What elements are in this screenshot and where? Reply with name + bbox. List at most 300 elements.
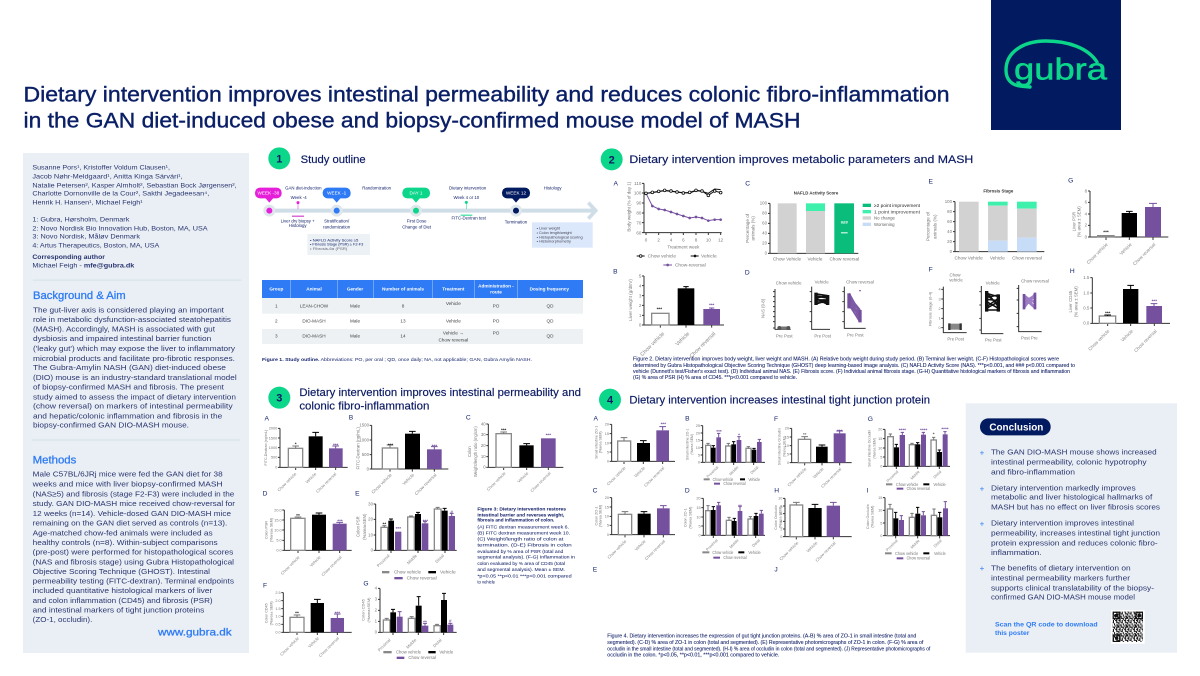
text: methods: (ZO-1, occludin). [33,615,92,624]
table: study groups: LEAN-CHOW [300,304,329,309]
chart E: colon PSR segmental: Middle [406,553,418,565]
chart A: body weight line chart: 8 [695,237,698,242]
chart C: NAFLD activity score stacked bars: 80 [762,211,768,216]
chart B: small intestine ZO-1 segmental: Distal [750,465,759,475]
legend: chart E: Chow vehicle [394,570,422,575]
table: study groups: PO [493,330,500,335]
conclusion bullets: intestinal permeability markers further [991,574,1130,583]
chart G: small intestine occludin segmental: 20 [878,428,882,432]
chart C: colon weight/length ratio: *** [501,428,507,433]
chart C: colon weight/length ratio: 10 [481,454,486,459]
conclusion bullets: + [980,484,985,493]
chart D: colon ZO-1 segmental: (%area SEM) [688,507,692,529]
chart H: colon occludin total [774,487,852,563]
legend: NAS: Worsening [874,222,895,227]
caption: figure 2 [633,356,1075,381]
chart G: small intestine occludin segmental: Small intestine Occludin [868,430,872,467]
chart E: colon PSR segmental: Proximal [376,553,391,568]
chart F: small intestine occludin total: 10 [785,444,789,448]
panel: section 2 metabolic parameters and MASH [601,148,1170,381]
chart E: fibrosis stage stacked bars: Vehicle [990,255,1005,260]
chart G: small intestine occludin segmental: **** [920,428,927,433]
chart G: small intestine occludin segmental: 0 [880,465,882,469]
legend: chart B: Chow vehicle [713,477,734,482]
chart G: liver PSR bars: Chow reversal [1132,242,1156,267]
chart D: colon ZO-1 segmental: 0 [699,534,701,538]
legend: chart G [383,650,454,660]
chart B: small intestine ZO-1 segmental: Small intestine ZO-1 [685,428,689,460]
chart D: individual NAS: Chow reversal [846,279,874,284]
inclusion criteria box: • Fibrosis-6α (PSR) [310,247,347,251]
timeline labels: Stratification/ [324,218,350,223]
chart H: colon occludin total: H [774,487,779,494]
chart F: small intestine occludin total: Vehicle [812,466,825,479]
chart D: individual NAS: Pre Post [776,334,793,339]
text: background and aim: (DIO) mouse is an industry-standard translational model [33,373,237,382]
heading: study outline: 1 [276,153,282,165]
chart C: colon weight/length ratio: 0 [483,465,486,470]
text: methods: Male C57BL/6JRj mice were fed the GAN diet for 38 [33,470,223,479]
chart E: colon PSR segmental: 20 [368,517,374,522]
chart E: colon PSR segmental: ** [383,521,386,526]
chart E: colon PSR segmental: 10 [368,532,374,537]
caption: figure 3 [477,507,575,586]
caption: figure 4: segmented). (C-D) % area of ZO-1 in colon (total and segmented). (E) Representative photomicrographs of ZO-1 in colon. (F-G) % area of [607,640,924,646]
chart G: small intestine occludin segmental [868,416,950,491]
chart B: small intestine ZO-1 segmental: 5 [698,453,700,457]
chart B: liver weight bars: *** [657,307,662,312]
text: background and aim: microbial products and facilitate pro-fibrotic responses. [33,354,235,363]
endpoints box: • Liver weight [537,227,560,231]
chart B: liver weight bars: 4 [639,283,642,288]
legend: chart G: Chow reversal [408,655,436,660]
chart A: small intestine ZO-1 total: Chow reversal [643,465,665,488]
heading: section 2: Dietary intervention improves metabolic parameters and MASH [629,154,973,166]
chart A: body weight line chart: 2 [657,237,660,242]
chart B: liver weight bars: 0 [639,323,642,328]
chart A: small intestine ZO-1 total: Chow vehicle [606,465,627,486]
caption: figure 3: colon evaluated by % area of CD45 (total [477,561,565,567]
chart H: liver CD45 bars: 1.0 [1083,290,1090,295]
chart D: individual NAS [745,270,874,339]
chart B: small intestine ZO-1 segmental: 25 [696,424,700,428]
chart F: small intestine occludin total: Chow reversal [820,466,842,489]
chart B: small intestine ZO-1 segmental: Proximal [706,465,719,479]
text: methods: and intestinal markers of tight junction proteins [33,606,205,615]
conclusion heading pill [980,418,1051,435]
endpoints box: • Colon length/weight [537,231,572,235]
table: study groups: PO [493,319,500,324]
chart A: FITC-dextran week 6: 0 [275,466,277,470]
legend: chart G: Chow vehicle [396,650,422,655]
QR call to action [995,623,1098,637]
chart C: colon ZO-1 total: 5 [607,524,609,528]
caption: figure 2: determined by Gubra Histopathological Objective Scoring Technique (GHOST) deep learning-based image analysis. (C) NAFLD Activity Score (NAS). ***p<0.001, and ### p<0.001 compared to [633,363,1075,369]
chart E: colon PSR segmental: 30 [368,501,374,506]
chart H: liver CD45 bars: 1.5 [1083,275,1090,280]
chart F: small intestine occludin total: Chow vehicle [786,466,808,487]
chart F: colon CD45 total: 0.5 [275,623,281,627]
table: study groups: 14 [400,334,406,339]
text: methods: weeks and mice with liver biopsy-confirmed MASH [32,480,223,489]
chart G: small intestine occludin segmental: Proximal [886,470,899,483]
text: methods: and colon inflammation (CD45) and fibrosis (PSR) [33,596,213,605]
chart B: small intestine ZO-1 segmental: 0 [698,461,700,465]
chart G: liver PSR bars: G [1068,177,1073,184]
chart G: colon CD45 segmental: Distal [432,637,443,648]
chart A: small intestine ZO-1 total [593,416,675,488]
chart I: colon occludin segmental: Middle [910,539,921,550]
panel: conclusion [966,403,1177,653]
chart G: small intestine occludin segmental: (%area SEM) [872,438,876,459]
chart A: small intestine ZO-1 total: 0 [607,460,609,464]
chart A: small intestine ZO-1 total: (%area SEM) [599,431,603,453]
chart G: colon CD45 segmental: # [449,619,452,624]
chart A: small intestine ZO-1 total: Small intestine ZO-1 [594,426,598,459]
text: background and aim: The Gubra-Amylin NASH (GAN) diet-induced obese [33,363,226,372]
legend: chart I: Vehicle [934,551,946,556]
chart F: small intestine occludin total: ** [803,432,807,437]
authors and affiliations: Corresponding author [32,254,106,261]
legend: chart D4: Vehicle [748,550,761,555]
chart D: colon ZO-1 segmental: Colon ZO-1 [684,508,688,527]
table: study groups: Dosing frequency [530,287,569,292]
chart F: individual fibrosis stage: 3 [939,297,941,301]
chart A: FITC-dextran week 6: 2000 [269,427,277,431]
chart B: small intestine ZO-1 segmental: (%area SEM) [690,434,694,455]
chart F: individual fibrosis stage: Pre Post [947,337,965,342]
heading: section 3: 3 [276,393,282,405]
legend: chart D4 [702,550,761,560]
panel: authors, background and methods [23,153,249,653]
legend: NAS: ≥2 point improvement [874,203,921,208]
chart B: liver weight bars: Liver weight (g/dEV) [628,279,633,321]
chart H: liver CD45 bars: *** [1105,310,1111,315]
chart H: liver CD45 bars: Chow vehicle [1087,328,1111,352]
chart G: small intestine occludin segmental: **** [941,426,949,431]
legend: chart I [885,551,946,561]
caption: figure 3: (B) FITC dextran measurement week 10. [477,530,570,536]
chart C: NAFLD activity score stacked bars: 60 [762,221,768,226]
chart F: individual fibrosis stage: Chow reversal [1021,278,1049,283]
panel: section 4 tight junction protein [593,389,950,658]
chart B: small intestine ZO-1 segmental: *** [716,429,722,434]
heading: section 2: 2 [609,154,615,166]
chart H: colon occludin total: 10 [778,497,782,501]
chart G: liver PSR bars: 4 [1085,211,1088,216]
chart F: colon CD45 total: 2.0 [275,599,281,603]
text: methods: Objective Scoring Technique (GHOST). Intestinal [33,567,210,576]
chart A: body weight line chart: Chow vehicle [648,254,677,259]
authors and affiliations: Natalie Petersen², Kasper Almholt², Sebastian Bock Jørgensen², [32,183,237,190]
table: study groups: QD [547,334,554,339]
chart A: small intestine ZO-1 total: 15 [605,432,609,436]
caption: figure 3: segmental analysis). (F-G) Inflammation in [477,555,575,561]
chart D: colon ZO-1 segmental [684,487,765,560]
chart C: NAFLD activity score stacked bars: 100 [760,201,768,206]
chart H: liver CD45 bars: H [1070,268,1075,275]
text: background and aim [33,306,237,430]
inclusion criteria box [307,234,370,255]
chart G: colon CD45 segmental: 0 [375,630,378,635]
chart A: FITC-dextran week 6: Chow reversal [315,471,337,494]
chart F: individual fibrosis stage: Chow [949,272,961,277]
chart D: colon PSR total [263,491,352,577]
chart C: NAFLD activity score stacked bars: 20 [762,241,768,246]
table: study groups: QD [547,304,554,309]
conclusion bullets: metabolic and liver histological hallmarks of [991,493,1153,502]
conclusion bullets: The benefits of dietary intervention on [991,563,1131,572]
table: study groups: DIO-MASH [302,319,326,324]
table: study groups [262,280,583,344]
chart A: body weight line chart: 90 [636,201,642,206]
legend: chart D4: Chow vehicle [712,550,734,555]
chart B: FITC-dextran week 10: Vehicle [401,472,416,486]
chart C: colon weight/length ratio: Colon [467,446,472,457]
chart G: colon CD45 segmental: 4 [375,586,378,591]
legend: chart G4: Chow vehicle [896,482,919,487]
chart C: colon ZO-1 total: 10 [605,515,609,519]
chart B: FITC-dextran week 10: 1000 [359,437,370,442]
chart C: colon weight/length ratio: Chow vehicle [486,470,507,492]
chart F: individual fibrosis stage: Pre Post [985,338,1002,343]
chart D: colon PSR total: D [263,491,268,498]
chart G: small intestine occludin segmental: 10 [878,446,882,450]
caption: figure 3: fibrosis and inflammation of colon. [477,518,555,524]
text: methods: 12 weeks (n=14). Vehicle-dosed GAN DIO-MASH mice [33,509,231,518]
chart G: colon CD45 segmental: 1 [375,619,378,624]
chart D: colon PSR total: ** [296,513,300,518]
chart C: colon weight/length ratio: 20 [481,443,486,448]
milestone: week 12: WEEK 12 [506,191,526,196]
chart C: NAFLD activity score stacked bars [745,181,921,262]
chart C: NAFLD activity score stacked bars: animals (%) [751,216,756,241]
table: study groups: Group [269,287,283,292]
chart D: colon PSR total: 20.0 [274,508,282,512]
chart A: FITC-dextran week 6: FITC-Dextran (ng/mL) [264,430,268,466]
legend: chart B: Chow reversal [723,481,746,486]
chart F: individual fibrosis stage: vehicle [949,277,963,282]
chart H: colon occludin total: 2 [780,527,782,531]
chart A: body weight line chart: 12 [718,237,724,242]
chart H: colon occludin total: 6 [780,512,782,516]
chart A: small intestine ZO-1 total: 10 [605,441,609,445]
chart F: colon CD45 total: 2.5 [275,591,281,595]
chart I: colon occludin segmental: 5 [880,521,882,525]
chart D: colon ZO-1 segmental: 5 [699,524,701,528]
chart H: colon occludin total: 8 [780,504,782,508]
chart E: fibrosis stage stacked bars: Chow Vehicle [955,255,983,260]
chart B: FITC-dextran week 10: 500 [362,452,370,457]
chart E: fibrosis stage stacked bars: Fibrosis Stage [983,188,1014,193]
chart I: colon occludin segmental: I [867,487,869,494]
logo: gubra: gubra [1014,52,1108,86]
chart A: body weight line chart: Treatment week [667,245,700,250]
chart H: liver CD45 bars: *** [1152,298,1157,303]
timeline labels: Histology [544,185,562,190]
authors and affiliations: Charlotte Dornonville de la Cour², Sakthi Jegadeesan⁴, [32,191,210,198]
conclusion bullets: Dietary intervention improves intestinal [991,519,1134,528]
chart B: small intestine ZO-1 segmental: * [738,433,740,438]
chart G: colon CD45 segmental: G [363,581,369,588]
text: background and aim: and hepatic/colonic inflammation and fibrosis in the [33,412,222,421]
chart I: colon occludin segmental [866,487,950,561]
chart C: colon ZO-1 total: 0 [607,533,609,537]
chart A: FITC-dextran week 6: *** [333,443,339,448]
chart E: fibrosis stage stacked bars: animals (%) [933,214,938,239]
chart C: colon ZO-1 total: Chow reversal [644,539,666,561]
chart I: colon occludin segmental: Colon Occludin [866,504,870,529]
panel: section 1 study outline [255,147,596,362]
chart B: small intestine ZO-1 segmental [685,416,765,486]
chart A: body weight line chart: Vehicle [701,254,717,259]
chart B: FITC-dextran week 10: 0 [367,466,370,471]
milestone: week 12 [502,188,530,217]
caption: figure 2: (G) % area of PSR (H) % area of CD45. ***p<0.001 compared to vehicle. [633,375,797,381]
website link: www.gubra.dk [157,627,233,638]
chart B: FITC-dextran week 10: *** [388,442,393,447]
chart A: body weight line chart: 4 [670,237,673,242]
chart C: NAFLD activity score stacked bars: Vehicle [807,257,823,262]
chart G: small intestine occludin segmental: **** [899,428,906,433]
caption: figure 3: (A) FITC dextran measurement week 6. [477,524,569,530]
conclusion bullets: and fibro-inflammation [991,468,1075,477]
timeline [255,185,596,255]
chart I: colon occludin segmental: (%area SEM) [871,506,875,528]
legend: chart I: Chow vehicle [895,551,919,556]
milestone: week -38 [255,188,282,217]
caption: figure 4 [607,634,931,658]
text: methods [32,470,235,624]
conclusion bullets: inflammation. [991,548,1042,557]
legend: chart B: Vehicle [748,477,761,482]
chart D: colon PSR total: 10.0 [274,528,282,532]
chart B: FITC-dextran week 10: Chow reversal [414,472,438,496]
chart C: NAFLD activity score stacked bars: Chow Vehicle [773,257,802,262]
chart C: colon ZO-1 total: Chow vehicle [606,538,628,560]
heading: study outline: Study outline [301,154,366,166]
text: background and aim: role in metabolic dysfunction-associated steatohepatitis [33,315,231,324]
chart H: colon occludin total: Colon Occludin [774,505,778,530]
caption: figure 3: to vehicle [477,580,495,586]
chart D: colon ZO-1 segmental: ** [738,503,742,508]
legend: NAS [863,203,921,227]
chart A: body weight line chart: 10 [706,237,711,242]
text: background and aim: ('leaky gut') which may expose the liver to inflammatory [33,344,235,353]
chart F: small intestine occludin total: F [774,416,778,423]
chart A: body weight line chart: A [613,181,618,188]
text: methods: (NAS and fibrosis stage) using Gubra Histopathological [33,557,234,566]
chart E: fibrosis stage stacked bars [926,178,1044,260]
table: study groups: 3 [275,334,278,339]
title: Dietary intervention improves intestinal permeability and reduces colonic fibro-inflammation [24,82,949,106]
heading: background and aim: Background & Aim [33,290,126,302]
chart G: small intestine occludin segmental: G [868,416,873,423]
chart D: colon ZO-1 segmental: Distal [751,538,761,548]
logo: gubra [991,0,1121,130]
chart H: liver CD45 bars: (% area ± SEM) [1074,286,1079,317]
timeline labels: randomization [323,224,351,229]
chart A: body weight line chart: 110 [634,181,642,186]
chart A: FITC-dextran week 6: 500 [271,456,277,460]
table: study groups: route [490,290,502,295]
chart D: individual NAS: Chow vehicle [776,281,802,286]
chart A: body weight line chart: 0 [645,237,648,242]
chart C: NAFLD activity score stacked bars: NAFLD Activity Score [794,191,839,196]
chart E: colon PSR segmental: Colon PSR [356,516,361,537]
chart G: liver PSR bars: Vehicle [1119,242,1133,256]
text: background and aim: The gut-liver axis is considered playing an important [33,306,225,315]
milestone: day 1 [402,188,430,217]
caption: figure 4: Figure 4. Dietary intervention increases the expression of gut tight junction proteins. (A-B) % area of ZO-1 in small intestine (total and [607,634,916,640]
legend: NAS: No change [874,216,896,221]
text: background and aim: (chow reversal) on markers of intestinal permeability [33,402,233,411]
chart C: colon weight/length ratio: *** [546,433,551,438]
conclusion bullets: + [980,564,985,573]
chart C: colon weight/length ratio: C [466,415,471,422]
authors and affiliations: 4: Artus Therapeutics, Boston, MA, USA [32,243,160,250]
chart F: colon CD45 total: Vehicle [307,635,320,649]
chart G: colon CD45 segmental: 2 [375,608,378,613]
chart B: liver weight bars: Chow reversal [689,331,717,360]
authors and affiliations: 1: Gubra, Hørsholm, Denmark [32,216,130,223]
legend: chart E [382,570,456,581]
chart F: small intestine occludin total: 0 [787,461,789,465]
chart F: small intestine occludin total [774,416,852,489]
table: study groups: Vehicle [446,319,461,324]
QR code [1111,610,1145,644]
chart I: colon occludin segmental: 15 [878,496,882,500]
text: methods: (NAS≥5) and fibrosis (stage F2-F3) were included in the [33,490,234,499]
chart D: colon PSR total: (%area± SEM) [270,518,274,542]
chart C: colon weight/length ratio: 30 [481,432,486,437]
chart B: FITC-dextran week 10: Chow vehicle [370,472,393,495]
conclusion bullets: + [980,519,985,528]
chart B: liver weight bars: 2 [639,303,642,308]
labels: photomicrograph panels E and J [593,566,778,573]
title: in the GAN diet-induced obese and biopsy-confirmed mouse model of MASH [24,108,800,132]
chart A: FITC-dextran week 6: A [264,416,269,423]
caption: figure 2: vehicle (Dunnett's test/Fisher's exact test). (D) Individual animal NAS. (E) Fibrosis score. (F) Individual animal fibrosis stage. (G-H) Quantitative histological markers of fibrosis and inflammation [633,369,1070,375]
chart A: FITC-dextran week 6: 1000 [269,446,277,450]
chart H: liver CD45 bars: 0.0 [1083,321,1090,326]
heading: section 4: 4 [607,395,614,407]
conclusion bullets: MASH but has no effect on liver fibrosis scores [991,503,1160,512]
table: study groups: 2 [275,319,278,324]
chart E: colon PSR segmental: (%area±SEM) [362,513,367,540]
timeline labels: Change of Diet [402,224,432,229]
table: study groups: Chow reversal [438,338,468,343]
chart D: colon PSR total: 15.0 [274,518,282,522]
chart F: individual fibrosis stage: 0 [939,326,941,330]
chart A: body weight line chart: 6 [682,237,685,242]
endpoints box [532,222,593,248]
chart D: individual NAS: Pre Post [814,334,832,339]
timeline labels: GAN diet-induction [285,185,322,190]
chart I: colon occludin segmental: Proximal [885,539,899,552]
chart G: colon CD45 segmental: 3 [375,597,378,602]
chart A: body weight line chart: 100 [634,191,642,196]
chart G: liver PSR bars: 2 [1085,223,1088,228]
timeline labels [281,185,562,229]
caption: figure 3: Figure 3: Dietary intervention restores [477,507,566,513]
chart C: colon weight/length ratio: 40 [481,421,486,426]
QR call to action: Scan the QR code to download [995,623,1098,629]
timeline labels: Termination [505,219,528,224]
chart E: colon PSR segmental: *** [396,526,401,531]
chart A: FITC-dextran week 6: Vehicle [304,471,318,484]
chart G: colon CD45 segmental: Middle [405,637,418,650]
